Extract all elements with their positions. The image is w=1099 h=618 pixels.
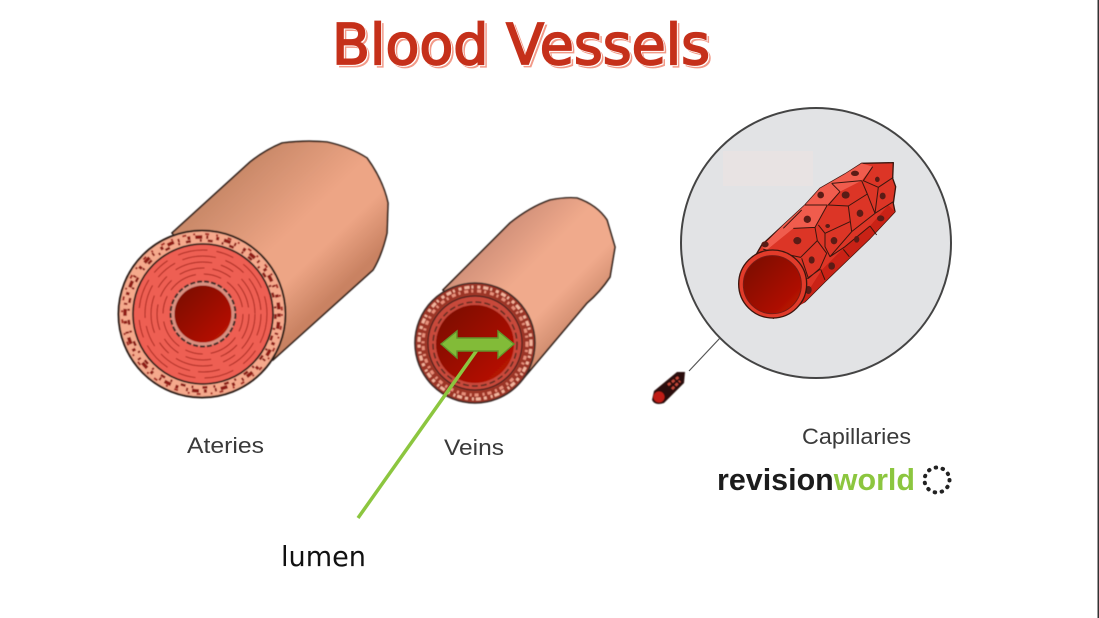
- artery illustration: [118, 141, 388, 397]
- capillary silhouette: [739, 163, 896, 318]
- small capillary: [652, 372, 685, 404]
- vein illustration: [415, 198, 615, 403]
- pointer line: [358, 350, 477, 518]
- title: Blood Vessels: [332, 13, 710, 78]
- leader line: [689, 338, 720, 371]
- capillary cell colour blocks: [762, 163, 895, 307]
- right edge line: [1098, 0, 1099, 618]
- top row highlight: [762, 163, 873, 250]
- faint label patch: [723, 151, 813, 186]
- artery cross-section: [118, 230, 286, 398]
- title: Blood Vessels: [333, 14, 711, 79]
- darkest lower row: [798, 205, 895, 307]
- vein lumen: [436, 305, 514, 383]
- logo: revisionworld: revisionworld: [717, 462, 915, 497]
- title: Blood Vessels: [334, 16, 712, 80]
- label: lumen: lumen: [281, 540, 366, 573]
- cell nuclei: [761, 171, 886, 294]
- label: capillaries: Capillaries: [802, 424, 911, 449]
- artery lumen: [170, 282, 236, 346]
- vein cross-section: [415, 283, 535, 403]
- label: arteries: Ateries: [187, 433, 264, 458]
- capillary opening: [739, 250, 807, 318]
- capillary magnified view: [652, 108, 951, 404]
- magnifier circle: [681, 108, 951, 378]
- artery outer body: [172, 141, 388, 360]
- double-headed arrow: [441, 331, 514, 358]
- lumen arrow: [358, 331, 514, 518]
- cell borders: [763, 167, 893, 280]
- vein outer body: [443, 198, 615, 380]
- label: veins: Veins: [444, 435, 504, 460]
- logo dot ring: [924, 468, 950, 492]
- capillary tube: [739, 163, 896, 318]
